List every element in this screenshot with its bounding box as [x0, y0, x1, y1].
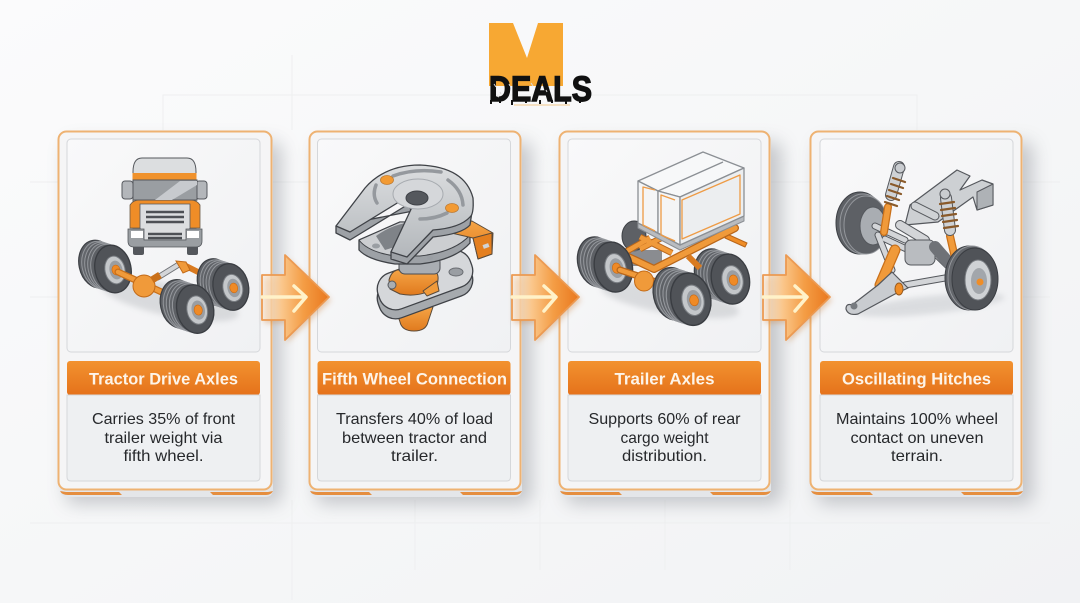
- image panel: [568, 139, 761, 352]
- card 2: Fifth Wheel Connection: [310, 132, 532, 504]
- image panel: [67, 139, 260, 352]
- description: between tractor and: [342, 430, 487, 447]
- header: [568, 361, 761, 395]
- description: Supports 60% of rear: [588, 411, 741, 428]
- icon: trailer axles with cargo box: [573, 152, 754, 329]
- header: [318, 361, 510, 395]
- logo: M Deals: [489, 23, 592, 109]
- description: Transfers 40% of load: [336, 411, 493, 428]
- header: [820, 361, 1013, 395]
- description: terrain.: [891, 448, 943, 465]
- description: cargo weight: [620, 430, 709, 447]
- description: [568, 395, 761, 481]
- image panel: [820, 139, 1013, 352]
- icon: truck and drive axles: [74, 158, 253, 337]
- card 3: Trailer Axles: [560, 132, 782, 504]
- header: Trailer Axles: [614, 370, 714, 388]
- description: [318, 395, 510, 481]
- description: fifth wheel.: [124, 448, 204, 465]
- description: [820, 395, 1013, 481]
- description: [67, 395, 260, 481]
- description: trailer.: [391, 448, 438, 465]
- icon: fifth wheel coupling: [336, 165, 493, 331]
- description: Maintains 100% wheel: [836, 411, 998, 428]
- logo: M Deals: DEALS: [489, 70, 592, 109]
- arrow 2: [512, 255, 581, 343]
- card 1: Tractor Drive Axles: [58, 132, 282, 504]
- description: contact on uneven: [850, 430, 984, 447]
- header: Oscillating Hitches: [842, 370, 991, 388]
- arrow 3: [763, 255, 832, 343]
- header: Fifth Wheel Connection: [322, 370, 507, 388]
- card 4: Oscillating Hitches: [810, 132, 1033, 504]
- description: distribution.: [622, 448, 707, 465]
- image panel: [318, 139, 510, 352]
- header: Tractor Drive Axles: [89, 370, 238, 388]
- header: [67, 361, 260, 395]
- icon: oscillating hitch suspension: [836, 163, 1006, 322]
- arrow 1: [262, 255, 331, 343]
- description: Carries 35% of front: [92, 411, 236, 428]
- description: trailer weight via: [104, 430, 223, 447]
